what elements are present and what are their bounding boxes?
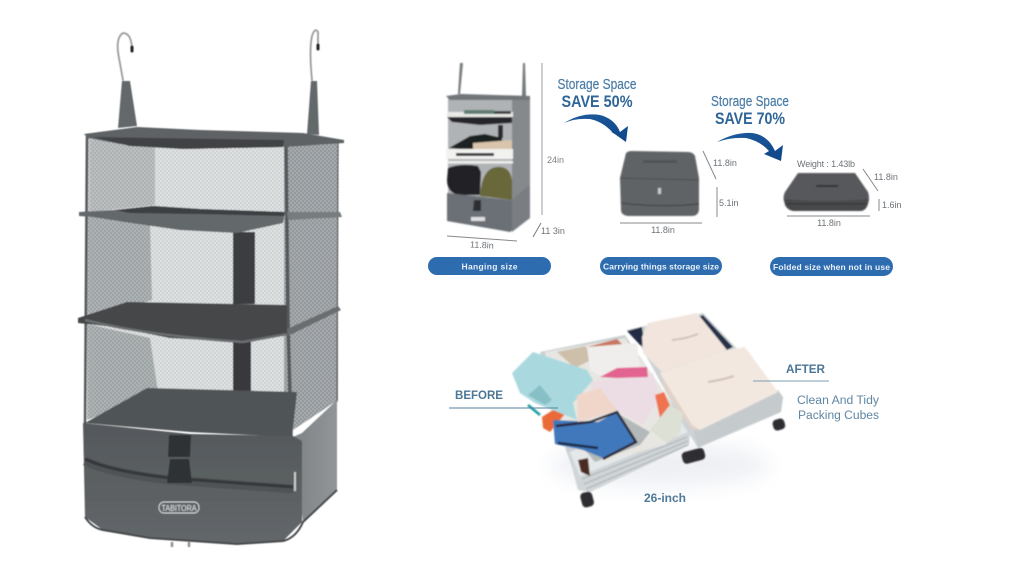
small organizer photo (446, 63, 530, 232)
compartment front (83, 423, 302, 544)
caption: packing cubes (797, 395, 879, 422)
right shell (627, 313, 783, 448)
bottom zipper tabs (172, 542, 189, 547)
bottom storage compartment lid (85, 388, 297, 437)
label: after: AFTER (786, 362, 825, 376)
dimension: height: 5.1in (719, 198, 739, 208)
zipper (85, 461, 293, 489)
label: before: BEFORE (455, 388, 503, 402)
shelf one (79, 206, 342, 233)
compartment side (293, 400, 337, 522)
label: hanging size (428, 257, 551, 275)
callout: save 70%: SAVE 70% (715, 109, 785, 128)
icon: hanger hooks (118, 30, 318, 80)
arrow: to folded size (717, 133, 783, 161)
caption: packing cubes: Packing Cubes (798, 410, 879, 422)
dimension: depth: 11.8in (713, 158, 737, 168)
label: folded size: Folded size when not in use (773, 262, 890, 272)
zipper pull (294, 472, 296, 491)
callout: save 50% (558, 77, 636, 111)
weight: Weight : 1.43lb (797, 159, 855, 169)
label: before (449, 388, 558, 408)
bottom edge (85, 490, 337, 544)
callout: save 50%: Storage Space (558, 77, 636, 93)
dimension: depth: 11.8in (874, 172, 898, 182)
light blue shirt (512, 352, 593, 420)
frame edges (85, 136, 338, 436)
hanging size diagram (446, 63, 565, 251)
cream packing cubes (642, 313, 778, 430)
soft shadow (550, 443, 770, 487)
wheels (579, 418, 786, 508)
callout: save 70%: Storage Space (711, 94, 789, 110)
dimension: width (447, 236, 517, 251)
label: hanging size: Hanging size (462, 262, 518, 272)
top panel (84, 127, 344, 149)
folded bag photo (784, 173, 869, 211)
callout: save 70% (711, 94, 789, 128)
dimension: thickness: 1.6in (882, 200, 902, 210)
dimension: width: 11.8in (651, 225, 675, 235)
carrying size diagram (620, 151, 739, 235)
caption: suitcase size: 26-inch (644, 493, 686, 505)
label: carrying size: Carrying things storage size (603, 262, 719, 272)
folded size diagram (784, 159, 902, 228)
messy clothes (512, 338, 683, 476)
label: folded size (770, 257, 893, 276)
caption: packing cubes: Clean And Tidy (797, 395, 879, 407)
product photo: hanging shelf organizer (78, 30, 344, 547)
buckle (167, 435, 192, 483)
shelf two (78, 302, 341, 342)
label: carrying size (600, 257, 722, 275)
suitcase photo: before and after (512, 313, 786, 508)
vertical support strap (233, 232, 255, 304)
label: after (753, 362, 829, 381)
arrow: to carrying size (564, 114, 628, 142)
mesh walls (87, 136, 338, 430)
dimension: depth: 11 3in (541, 226, 565, 236)
dimension: depth (533, 223, 565, 237)
hanging straps (118, 81, 319, 135)
dimension: width: 11.8in (470, 239, 494, 251)
callout: save 50%: SAVE 50% (562, 92, 632, 111)
dimension: width: 11.8in (817, 218, 841, 228)
brand label: TABITORA (162, 504, 197, 513)
left shell (540, 335, 690, 492)
carrying cube photo (620, 151, 699, 216)
dimension: height: 24in (547, 155, 564, 165)
